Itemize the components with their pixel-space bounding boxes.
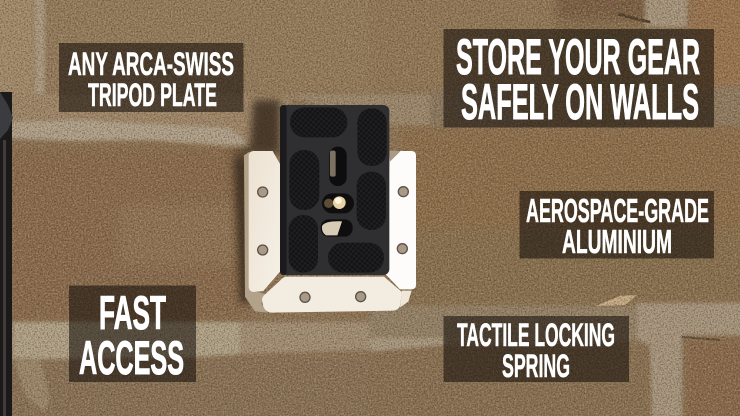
label: tactile locking spring: TACTILE LOCKING bbox=[457, 317, 615, 353]
grip pads bbox=[289, 107, 387, 273]
label: store your gear safely on walls bbox=[444, 29, 714, 130]
aluminium left rail bbox=[249, 151, 280, 292]
label: any arca-swiss tripod plate: TRIPOD PLATE bbox=[88, 77, 217, 113]
label: fast access: FAST bbox=[99, 286, 166, 339]
cast shadow bbox=[227, 100, 280, 303]
aluminium right rail bbox=[385, 151, 416, 289]
upper slot bbox=[329, 147, 347, 186]
centre hole with brass screw bbox=[322, 193, 354, 213]
label: aerospace-grade aluminium bbox=[520, 191, 714, 260]
hex screws bbox=[258, 187, 408, 302]
label: any arca-swiss tripod plate bbox=[59, 43, 244, 113]
label: fast access: ACCESS bbox=[79, 331, 184, 384]
label: any arca-swiss tripod plate: ANY ARCA-SWISS bbox=[68, 46, 234, 82]
aluminium bottom clamp bbox=[262, 277, 402, 313]
bottom edge line bbox=[0, 416, 740, 417]
black plate bbox=[280, 105, 389, 275]
mount with tripod plate bbox=[227, 100, 416, 313]
label: fast access bbox=[69, 286, 196, 384]
aluminium lower base bbox=[244, 152, 267, 313]
label: tactile locking spring: SPRING bbox=[502, 348, 570, 384]
lower slot bbox=[321, 219, 353, 237]
label: tactile locking spring bbox=[444, 316, 629, 384]
black strap at left edge bbox=[0, 92, 13, 417]
